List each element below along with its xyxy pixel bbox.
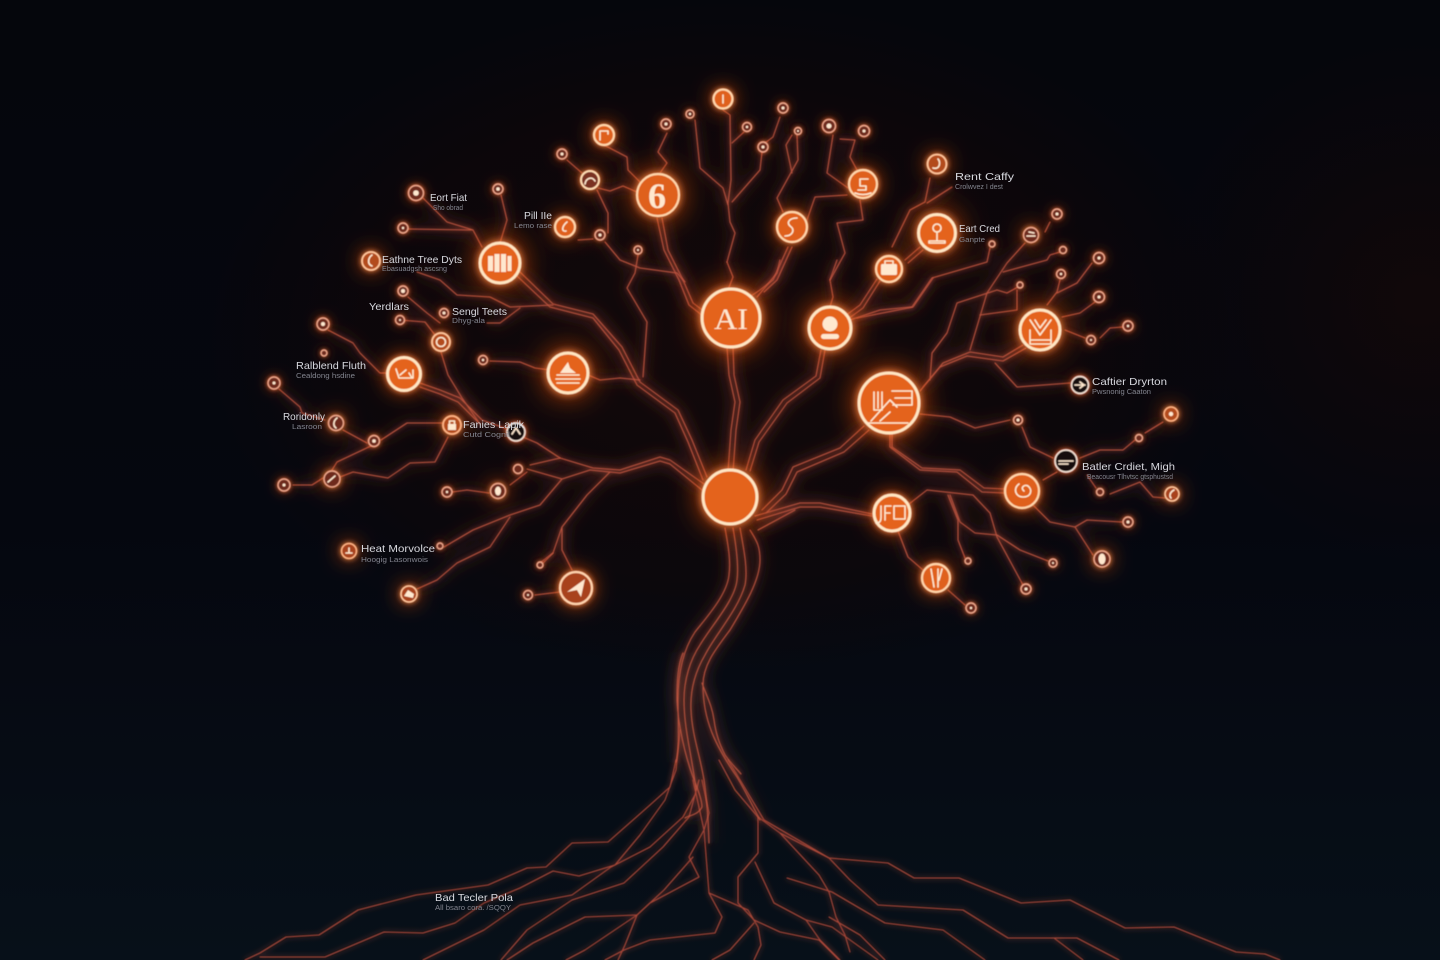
node small ag (989, 241, 995, 247)
node small al (1123, 321, 1133, 331)
label: Caftier Dryrton: Caftier Dryrton (1092, 376, 1167, 388)
node small ao (1136, 434, 1142, 442)
node small p (440, 308, 448, 318)
node small ar (1123, 517, 1133, 527)
node: top left ring (594, 125, 614, 145)
label: Eort Fiat: Eort Fiat (430, 192, 467, 204)
node: number icon (637, 174, 679, 216)
node: person bust (809, 307, 851, 349)
node small ak (1094, 292, 1104, 302)
node: ship icon (548, 353, 588, 393)
node small h (858, 126, 870, 136)
label: Sengl Teets: Sengl Teets (452, 306, 507, 318)
node small at (965, 558, 971, 564)
label: Pill IIe (514, 210, 552, 230)
node: upper right ring (928, 154, 946, 174)
node small u (328, 416, 344, 430)
node: oval glow (1094, 551, 1110, 567)
node: S glyph (777, 212, 807, 242)
node: ring bottom left (342, 544, 356, 558)
node small l (408, 186, 424, 200)
label: Eart Cred (959, 223, 1000, 244)
label: Heat Morvolce (361, 543, 435, 564)
label: Rent Caffy: Rent Caffy (955, 171, 1015, 183)
label: Rent Caffy (955, 171, 1015, 191)
node: suitcase (876, 256, 902, 282)
node small z (442, 487, 452, 497)
node small n (398, 223, 408, 233)
branches right (845, 178, 1165, 605)
node: barrels icon (480, 243, 520, 283)
label: Sengl Teets: Dhyg-ala (452, 318, 485, 325)
node: pen strokes (922, 564, 950, 592)
label: Bad Tecler Pola: Bad Tecler Pola (435, 892, 513, 904)
main central branches (417, 218, 933, 589)
node: AI hub: AI (714, 303, 748, 336)
node small j (595, 230, 605, 240)
node small as (1049, 559, 1057, 567)
label: Sengl Teets (452, 306, 507, 325)
label: Batler Crdiet, Migh: Batler Crdiet, Migh (1082, 461, 1175, 473)
node small e (758, 142, 768, 152)
node small aa (514, 464, 522, 474)
node: JFO (874, 495, 910, 531)
label: Bad Tecler Pola (435, 892, 513, 912)
node small ad (524, 590, 532, 600)
node: spiral (1005, 474, 1039, 508)
label: Rent Caffy: Crolwvez I dest (955, 184, 1003, 191)
label: Heat Morvolce: Heat Morvolce (361, 543, 435, 555)
label: Eort Fiat (430, 192, 467, 212)
node: chart sign hub (859, 373, 919, 433)
node: top centre (714, 90, 732, 108)
node: outlined switch ring (1055, 450, 1077, 472)
node small ai (1056, 270, 1066, 278)
node small q (396, 316, 404, 324)
node: control stand (918, 214, 956, 252)
node: navigation arrow (560, 572, 592, 604)
node small c (661, 119, 671, 129)
node small a (778, 103, 788, 113)
label: Roridonly (283, 411, 326, 431)
label: Ralblend Fluth (296, 360, 366, 380)
label: Eort Fiat: Sho obrad (433, 205, 463, 212)
node: root hub (703, 470, 757, 524)
node small g (822, 120, 836, 132)
label: Eathne Tree Dyts: Eathne Tree Dyts (382, 254, 462, 266)
node: drop ring (555, 217, 575, 237)
node: number icon: 6 (648, 176, 666, 216)
node small au (1021, 584, 1031, 594)
node small o (398, 286, 408, 296)
node small aq (1165, 487, 1179, 501)
label: Caftier Dryrton (1092, 376, 1167, 396)
node small w (478, 356, 488, 364)
node small x (278, 479, 290, 491)
label: Eathne Tree Dyts: Ebasuadgsh ascsng (382, 266, 447, 273)
node small ah (1094, 252, 1104, 264)
label: Heat Morvolce: Hoogig Lasonwois (361, 557, 429, 564)
node small ac (537, 562, 543, 568)
node: wave sign (388, 358, 420, 390)
node small k (634, 246, 642, 254)
label: Batler Crdiet, Migh (1082, 461, 1175, 481)
label: Caftier Dryrton: Pwsnonig Caaton (1092, 389, 1151, 396)
label: Roridonly: Lasroon (292, 424, 322, 431)
label: Ralblend Fluth: Cealdong hsdine (296, 373, 355, 380)
node small i (557, 149, 567, 159)
label: Yerdlars: Yerdlars (369, 301, 409, 313)
node small y (324, 471, 340, 487)
node small an (1014, 416, 1022, 424)
node small r (317, 318, 329, 330)
label: Pill IIe: Lemo rase (514, 223, 552, 230)
node small d (742, 122, 752, 132)
node small ap (1096, 488, 1104, 496)
branches top (695, 110, 863, 300)
node small b (686, 110, 694, 118)
node: white ring (507, 423, 525, 441)
label: Batler Crdiet, Migh: Beacousr Tlhvtsc gtsphustsd (1087, 474, 1173, 481)
tree trunk (676, 528, 760, 843)
node small ae (1052, 209, 1062, 219)
node: small swirl (1024, 228, 1038, 242)
node: left top ring (581, 171, 599, 189)
branches left (279, 133, 685, 595)
roots (245, 730, 1280, 960)
node: AI hub (702, 289, 760, 347)
label: Ralblend Fluth: Ralblend Fluth (296, 360, 366, 372)
label: Fanies Lapik (463, 419, 525, 439)
label: Pill IIe: Pill IIe (524, 210, 552, 222)
node small f (794, 128, 802, 134)
node small ab (437, 543, 443, 549)
node small av (966, 603, 976, 613)
node: G glyph (849, 170, 877, 198)
node small af (1060, 246, 1066, 254)
node: concentric ring (432, 333, 450, 351)
label: Eathne Tree Dyts (382, 254, 462, 273)
label: Eart Cred: Eart Cred (959, 223, 1000, 235)
label: Bad Tecler Pola: All bsaro cora. /SQQY (435, 905, 511, 912)
node small m (493, 184, 503, 194)
label: Fanies Lapik: Cutd Cognil (463, 432, 511, 439)
node: bright oval (490, 484, 506, 498)
node: mail chevron (1020, 310, 1060, 350)
node: right ring (1164, 407, 1178, 421)
node small aj (1017, 282, 1023, 288)
node small am (1086, 336, 1096, 344)
label: Fanies Lapik: Fanies Lapik (463, 419, 525, 431)
node: ring with swirl (362, 252, 380, 270)
node: outlined cipher ring (1072, 376, 1088, 394)
node: lock ring (443, 416, 461, 434)
label: Roridonly: Roridonly (283, 411, 326, 423)
label: Eart Cred: Ganpte (959, 237, 985, 244)
node: ring low left (401, 586, 417, 602)
node small s (321, 350, 327, 356)
node small v (368, 436, 380, 446)
node small t (268, 377, 280, 389)
